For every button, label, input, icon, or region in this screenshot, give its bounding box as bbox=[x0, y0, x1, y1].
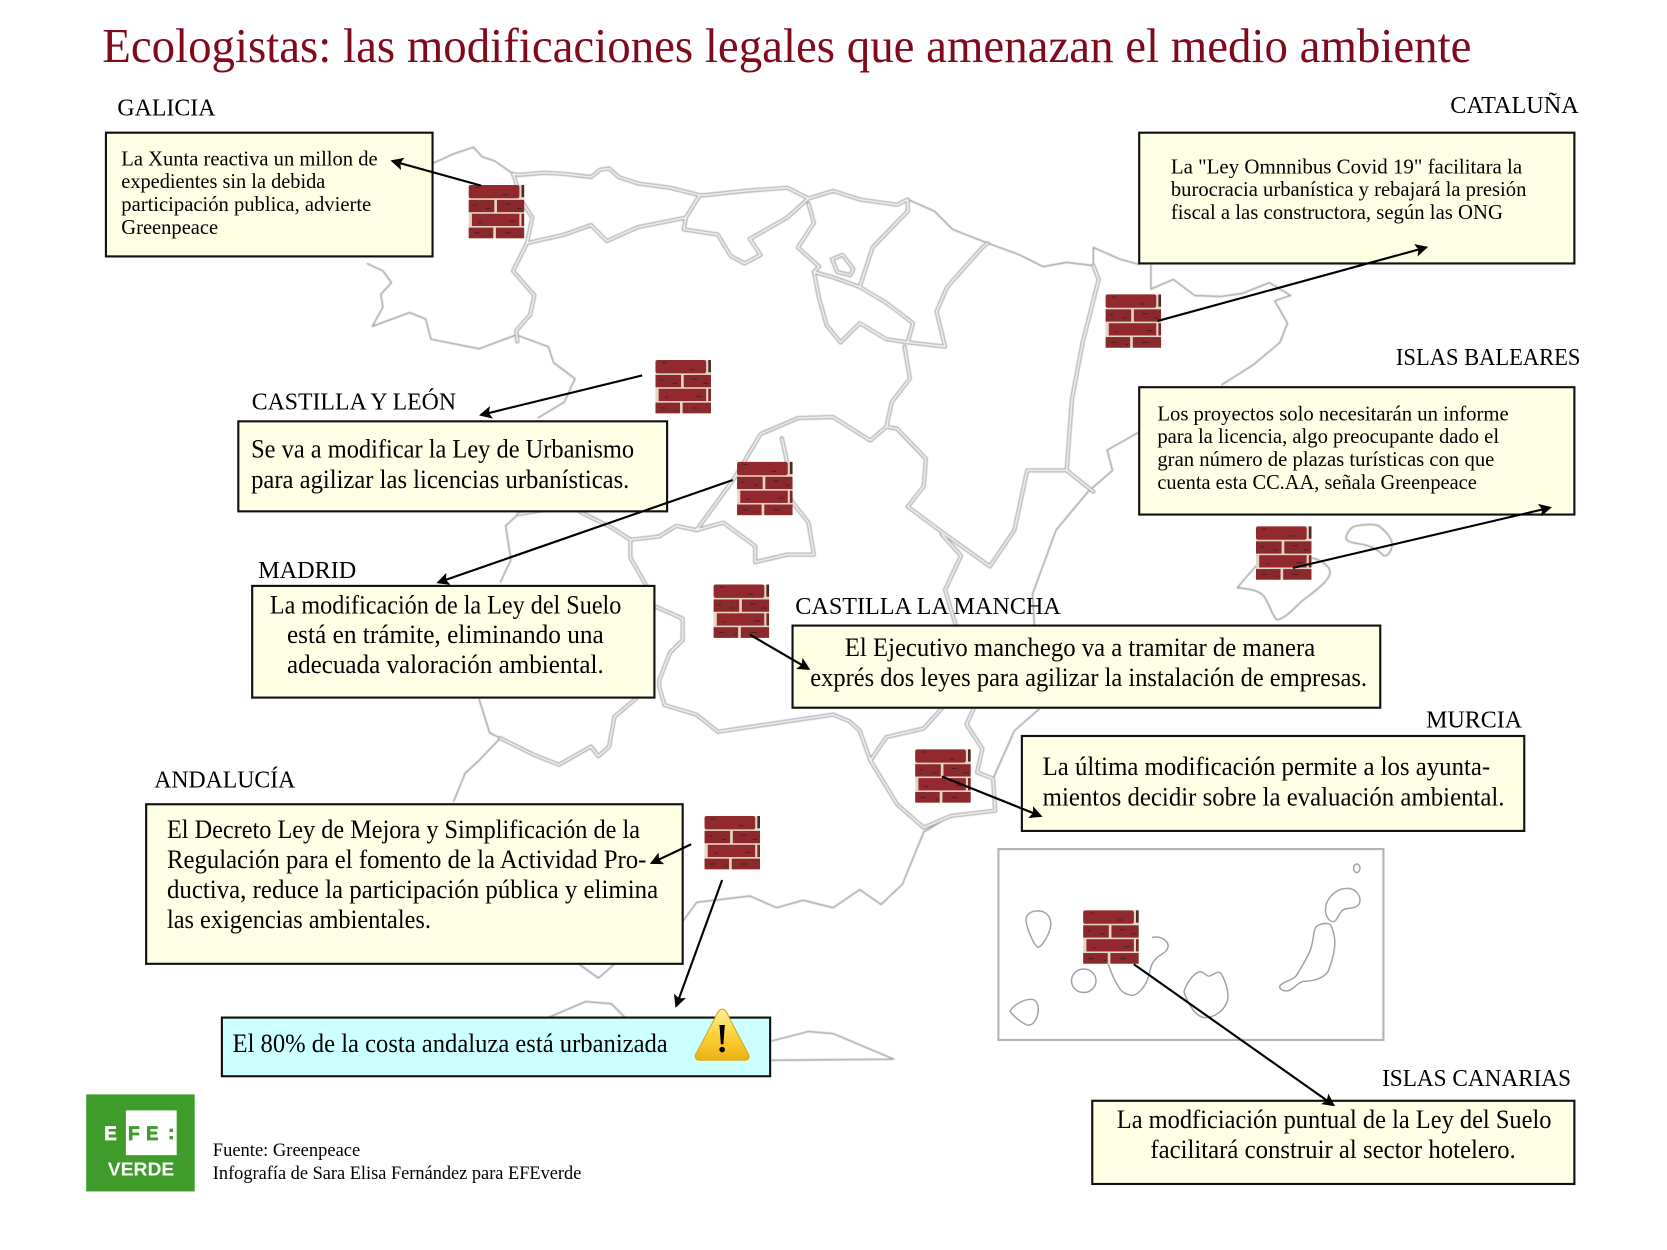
text: Islas Baleares: Los proyectos solo necesitarán un informe bbox=[1157, 402, 1509, 425]
arrow: Murcia bbox=[942, 777, 1041, 816]
arrow: Galicia bbox=[393, 161, 481, 186]
text: Murcia bbox=[1043, 752, 1505, 811]
source credits bbox=[213, 1140, 581, 1184]
panel: Murcia bbox=[1022, 706, 1524, 831]
text: Murcia: mientos decidir sobre la evaluación ambiental. bbox=[1043, 782, 1505, 811]
text: Islas Canarias bbox=[1117, 1105, 1551, 1164]
logo: EFE Verde: F bbox=[128, 1124, 140, 1145]
text: Galicia: Greenpeace bbox=[121, 216, 218, 239]
icon: brick wall Islas Canarias bbox=[1083, 910, 1139, 964]
logo: EFE Verde bbox=[86, 1094, 195, 1191]
source credits: Infografía de Sara Elisa Fernández para EFEverde bbox=[213, 1163, 581, 1184]
arrow: Castilla y León bbox=[481, 375, 642, 415]
icon: brick wall Galicia bbox=[469, 185, 524, 238]
text: Cataluña: La "Ley Omnnibus Covid 19" facilitara la bbox=[1171, 155, 1522, 178]
arrow: Andalucía to coast callout bbox=[676, 880, 722, 1006]
heading: Cataluña: CATALUÑA bbox=[1450, 91, 1579, 119]
logo: EFE Verde: E bbox=[146, 1124, 159, 1145]
text: Castilla La Mancha: exprés dos leyes para agilizar la instalación de empresas. bbox=[810, 663, 1367, 692]
heading: Castilla La Mancha: CASTILLA LA MANCHA bbox=[795, 593, 1061, 620]
text: Madrid: está en trámite, eliminando una bbox=[287, 620, 604, 649]
panel: Galicia bbox=[106, 95, 433, 256]
heading: Islas Canarias: ISLAS CANARIAS bbox=[1382, 1065, 1571, 1092]
map: coastline and borders bbox=[367, 147, 1291, 1060]
text: Castilla y León: Se va a modificar la Ley de Urbanismo bbox=[251, 435, 634, 464]
heading: Murcia: MURCIA bbox=[1426, 706, 1522, 733]
text: Murcia: La última modificación permite a los ayunta- bbox=[1043, 752, 1490, 781]
icon: brick wall Andalucía bbox=[705, 816, 760, 869]
panel: Castilla y León bbox=[238, 388, 667, 511]
icon: brick wall Castilla y León bbox=[655, 360, 711, 413]
text: Islas Baleares: para la licencia, algo preocupante dado el bbox=[1157, 425, 1499, 448]
text: Cataluña: fiscal a las constructora, según las ONG bbox=[1171, 201, 1503, 224]
text: Islas Canarias: La modficiación puntual de la Ley del Suelo bbox=[1117, 1105, 1551, 1134]
icon: brick wall Murcia bbox=[915, 749, 971, 803]
text: Galicia: La Xunta reactiva un millon de bbox=[121, 147, 378, 170]
text: Madrid: La modificación de la Ley del Suelo bbox=[270, 590, 621, 619]
panel: Madrid bbox=[252, 557, 654, 698]
map: Balearic islands bbox=[1237, 524, 1392, 620]
panel: Canary Islands inset bbox=[998, 849, 1383, 1040]
text: Castilla La Mancha bbox=[810, 633, 1367, 692]
title: Ecologistas: las modificaciones legales que amenazan el medio ambiente bbox=[102, 18, 1471, 73]
arrow: Madrid bbox=[438, 480, 733, 582]
heading: Galicia: GALICIA bbox=[117, 95, 216, 122]
text: Andalucía bbox=[167, 815, 659, 934]
callout: costa andaluza: El 80% de la costa andaluza está urbanizada bbox=[233, 1029, 668, 1058]
arrow: Islas Baleares bbox=[1293, 508, 1550, 568]
text: Galicia: expedientes sin la debida bbox=[121, 170, 325, 193]
heading: Castilla y León: CASTILLA Y LEÓN bbox=[252, 388, 456, 416]
arrow: Castilla La Mancha bbox=[750, 635, 809, 669]
text: Andalucía: El Decreto Ley de Mejora y Simplificación de la bbox=[167, 815, 640, 844]
icon: warning triangle bbox=[695, 1009, 749, 1060]
text: Andalucía: las exigencias ambientales. bbox=[167, 905, 431, 934]
icon: brick wall Castilla La Mancha bbox=[714, 585, 769, 638]
arrow: Cataluña bbox=[1157, 247, 1426, 321]
text: Islas Canarias: facilitará construir al sector hotelero. bbox=[1150, 1135, 1516, 1164]
text: Islas Baleares: gran número de plazas turísticas con que bbox=[1157, 448, 1494, 471]
callout: costa andaluza bbox=[222, 1009, 770, 1076]
panel: Islas Canarias bbox=[1092, 1065, 1574, 1184]
source credits: Fuente: Greenpeace bbox=[213, 1140, 360, 1161]
text: Galicia bbox=[121, 147, 378, 239]
text: Madrid bbox=[270, 590, 621, 679]
heading: Madrid: MADRID bbox=[258, 557, 356, 584]
icon: brick wall Cataluña bbox=[1106, 294, 1161, 348]
icon: brick wall Islas Baleares bbox=[1256, 526, 1311, 580]
panel: Castilla La Mancha bbox=[793, 593, 1380, 708]
text: Castilla La Mancha: El Ejecutivo manchego va a tramitar de manera bbox=[845, 633, 1316, 662]
arrow: Islas Canarias bbox=[1134, 964, 1333, 1105]
panel: Islas Baleares bbox=[1139, 344, 1580, 515]
text: Andalucía: Regulación para el fomento de la Actividad Pro- bbox=[167, 845, 646, 874]
text: Islas Baleares bbox=[1157, 402, 1509, 494]
panel: Cataluña bbox=[1139, 91, 1579, 263]
heading: Andalucía: ANDALUCÍA bbox=[154, 766, 296, 794]
text: Castilla y León: para agilizar las licencias urbanísticas. bbox=[251, 465, 629, 494]
text: Castilla y León bbox=[251, 435, 634, 494]
arrow: Andalucía to text bbox=[652, 844, 691, 863]
logo: EFE Verde: E bbox=[104, 1124, 117, 1145]
text: Andalucía: ductiva, reduce la participación pública y elimina bbox=[167, 875, 659, 904]
logo: EFE Verde: : bbox=[168, 1123, 174, 1144]
text: Islas Baleares: cuenta esta CC.AA, señala Greenpeace bbox=[1157, 471, 1477, 494]
text: Cataluña: burocracia urbanística y rebajará la presión bbox=[1171, 178, 1527, 201]
map of Spain bbox=[367, 147, 1392, 1060]
panel: Andalucía bbox=[146, 766, 683, 964]
logo: EFE Verde: VERDE bbox=[108, 1158, 174, 1179]
text: Galicia: participación publica, advierte bbox=[121, 193, 371, 216]
icon: brick wall Madrid bbox=[737, 462, 793, 515]
heading: Islas Baleares: ISLAS BALEARES bbox=[1396, 344, 1580, 371]
text: Madrid: adecuada valoración ambiental. bbox=[287, 650, 604, 679]
text: Cataluña bbox=[1171, 155, 1527, 224]
